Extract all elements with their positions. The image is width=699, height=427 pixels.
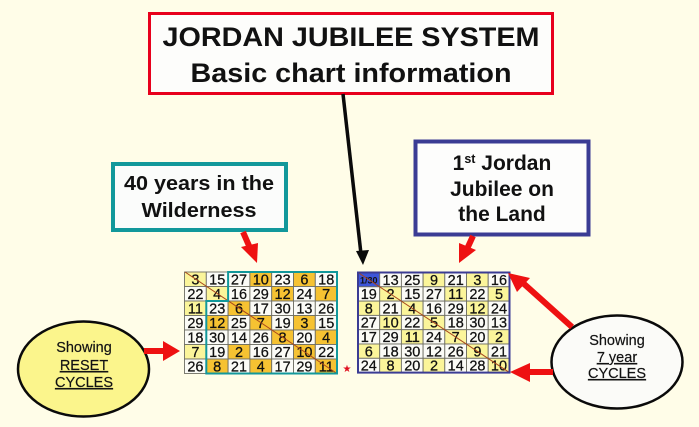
row 3: 6 — [235, 302, 243, 318]
row 7: 28 — [469, 359, 485, 375]
row 3: 17 — [253, 302, 269, 318]
callout: showing 7 year cycles: 7 year — [597, 350, 637, 366]
row 7: 4 — [257, 360, 265, 376]
callout: 40 years in the Wilderness: 40 years in the — [124, 173, 274, 195]
row 4: 22 — [404, 316, 420, 332]
row 7: 2 — [430, 359, 438, 375]
row 4: 18 — [448, 316, 464, 332]
arrow: 7 year cycles to bottom of right chart — [510, 363, 553, 382]
row 7: 10 — [491, 359, 507, 375]
callout: showing reset cycles: CYCLES — [55, 375, 113, 391]
row 5: 20 — [296, 330, 312, 346]
row 3: 29 — [448, 301, 464, 317]
row 4: 10 — [383, 316, 399, 332]
row 6: 9 — [473, 344, 481, 360]
row 2: 22 — [187, 287, 203, 303]
row 4: 7 — [257, 316, 265, 332]
row 6: 19 — [209, 345, 225, 361]
row 6: 22 — [318, 345, 334, 361]
row 5 — [358, 330, 510, 346]
row 2: 22 — [469, 287, 485, 303]
row 1: 13 — [383, 273, 399, 289]
row 2: 24 — [296, 287, 312, 303]
row 5: 11 — [405, 330, 420, 346]
callout: showing 7 year cycles: Showing — [589, 333, 645, 349]
row 3: 12 — [469, 301, 485, 317]
row 2: 16 — [231, 287, 247, 303]
row 1: 27 — [231, 272, 247, 288]
callout: 1st Jordan Jubilee on the Land — [416, 142, 588, 234]
row 4: 13 — [491, 316, 507, 332]
row 6: 6 — [365, 344, 373, 360]
row 2: 11 — [448, 287, 463, 303]
row 2: 12 — [275, 287, 291, 303]
row 1: 21 — [448, 273, 464, 289]
row 2: 7 — [322, 287, 330, 303]
row 4 — [358, 315, 510, 332]
callout: showing 7 year cycles: CYCLES — [588, 366, 646, 382]
row 5: 26 — [253, 330, 269, 346]
row 5: 4 — [322, 330, 330, 346]
row 1: 23 — [275, 272, 291, 288]
row 6: 16 — [253, 345, 269, 361]
title box: JORDAN JUBILEE SYSTEM — [162, 22, 540, 52]
row 1: 9 — [430, 273, 438, 289]
row 5: 20 — [469, 330, 485, 346]
chart: right grid, first jubilee — [358, 272, 510, 375]
row 1 — [184, 272, 337, 288]
row 5: 30 — [209, 330, 225, 346]
row 7: 21 — [231, 360, 247, 376]
row 7: 24 — [361, 359, 377, 375]
row 6 — [358, 344, 510, 360]
row 5: 7 — [452, 330, 460, 346]
chart: left grid, 40 years — [184, 272, 337, 376]
row 2: 4 — [213, 287, 221, 303]
row 6: 30 — [404, 344, 420, 360]
row 3: 24 — [491, 301, 507, 317]
row 6: 7 — [191, 345, 199, 361]
callout: 1st Jordan Jubilee on the Land: st — [464, 152, 476, 166]
row 3: 21 — [383, 301, 399, 317]
row 5 — [184, 330, 337, 346]
row 7 — [184, 359, 337, 376]
row 4: 27 — [361, 316, 377, 332]
title box — [150, 14, 552, 94]
row 4: 5 — [430, 316, 438, 332]
arrow: jubilee callout to right chart — [459, 236, 476, 263]
row 4: 25 — [231, 316, 247, 332]
blue outline — [358, 272, 510, 373]
row 5: 29 — [383, 330, 399, 346]
arrow: 7 year cycles to top of right chart — [508, 273, 572, 327]
callout: 1st Jordan Jubilee on the Land: the Land — [458, 203, 546, 226]
row 2: 15 — [404, 287, 420, 303]
row 3: 8 — [365, 301, 373, 317]
row 3: 26 — [318, 302, 334, 318]
callout: 1st Jordan Jubilee on the Land: Jubilee on — [450, 178, 554, 201]
row 2 — [184, 286, 337, 303]
row 7 — [358, 358, 510, 375]
row 5: 2 — [495, 330, 503, 346]
row 3: 30 — [275, 302, 291, 318]
title box: Basic chart information — [190, 58, 512, 88]
row 1: 6 — [300, 272, 308, 288]
callout: showing 7 year cycles — [552, 316, 682, 408]
row 6: 26 — [448, 344, 464, 360]
row 4: 15 — [318, 316, 334, 332]
row 2: 29 — [253, 287, 269, 303]
arrow: wilderness callout to left chart — [241, 232, 258, 263]
callout: 1st Jordan Jubilee on the Land: Jordan — [475, 152, 551, 175]
row 4: 30 — [469, 316, 485, 332]
row 1: 3 — [191, 272, 199, 288]
row 6 — [184, 344, 337, 361]
row 5: 8 — [279, 330, 287, 346]
row 4 — [184, 316, 337, 332]
arrow: reset cycles to left chart — [144, 341, 180, 361]
row 7: 14 — [448, 359, 464, 375]
row 7: 20 — [404, 359, 420, 375]
row 5: 18 — [187, 330, 203, 346]
row 3 — [184, 301, 337, 318]
row 3: 16 — [426, 301, 442, 317]
row 4: 29 — [187, 316, 203, 332]
callout: 40 years in the Wilderness — [113, 164, 286, 230]
row 4: 19 — [275, 316, 291, 332]
row 7: 17 — [275, 360, 291, 376]
row 7: 29 — [296, 360, 312, 376]
icon: red star: ★ — [343, 364, 352, 375]
diagonal line — [358, 272, 510, 373]
row 1: 1/30 — [360, 276, 378, 286]
row 1: 25 — [404, 273, 420, 289]
callout: showing reset cycles: Showing — [56, 340, 112, 356]
row 3 — [358, 301, 510, 317]
row 1: 18 — [318, 272, 334, 288]
row 1: 3 — [473, 273, 481, 289]
row 7: 8 — [213, 360, 221, 376]
diagonal line — [185, 272, 337, 374]
row 1: 15 — [209, 272, 225, 288]
row 1: 16 — [491, 273, 507, 289]
row 7: 11 — [319, 360, 334, 376]
callout: showing reset cycles: RESET — [60, 358, 108, 374]
callout: showing reset cycles — [18, 322, 149, 416]
row 3: 13 — [296, 302, 312, 318]
teal outline: 40 year region — [206, 272, 337, 374]
row 4: 3 — [300, 316, 308, 332]
row 6: 2 — [235, 345, 243, 361]
row 2: 19 — [361, 287, 377, 303]
row 3: 4 — [408, 301, 416, 317]
row 2: 27 — [426, 287, 442, 303]
row 5: 24 — [426, 330, 442, 346]
row 2 — [358, 287, 510, 303]
row 6: 21 — [491, 344, 507, 360]
row 2: 5 — [495, 287, 503, 303]
row 5: 17 — [361, 330, 377, 346]
row 1 — [358, 272, 510, 289]
row 3: 11 — [188, 302, 203, 318]
row 6: 12 — [426, 344, 442, 360]
row 4: 12 — [209, 316, 225, 332]
row 2: 2 — [387, 287, 395, 303]
callout: 40 years in the Wilderness: Wilderness — [142, 200, 256, 222]
row 1: 10 — [253, 272, 269, 288]
callout: 1st Jordan Jubilee on the Land: 1 — [453, 152, 464, 175]
row 6: 27 — [275, 345, 291, 361]
row 7: 26 — [187, 360, 203, 376]
row 6: 10 — [296, 345, 312, 361]
row 5: 14 — [231, 330, 247, 346]
arrow: title to chart gap — [343, 94, 369, 265]
row 6: 18 — [383, 344, 399, 360]
row 7: 8 — [387, 359, 395, 375]
row 3: 23 — [209, 302, 225, 318]
